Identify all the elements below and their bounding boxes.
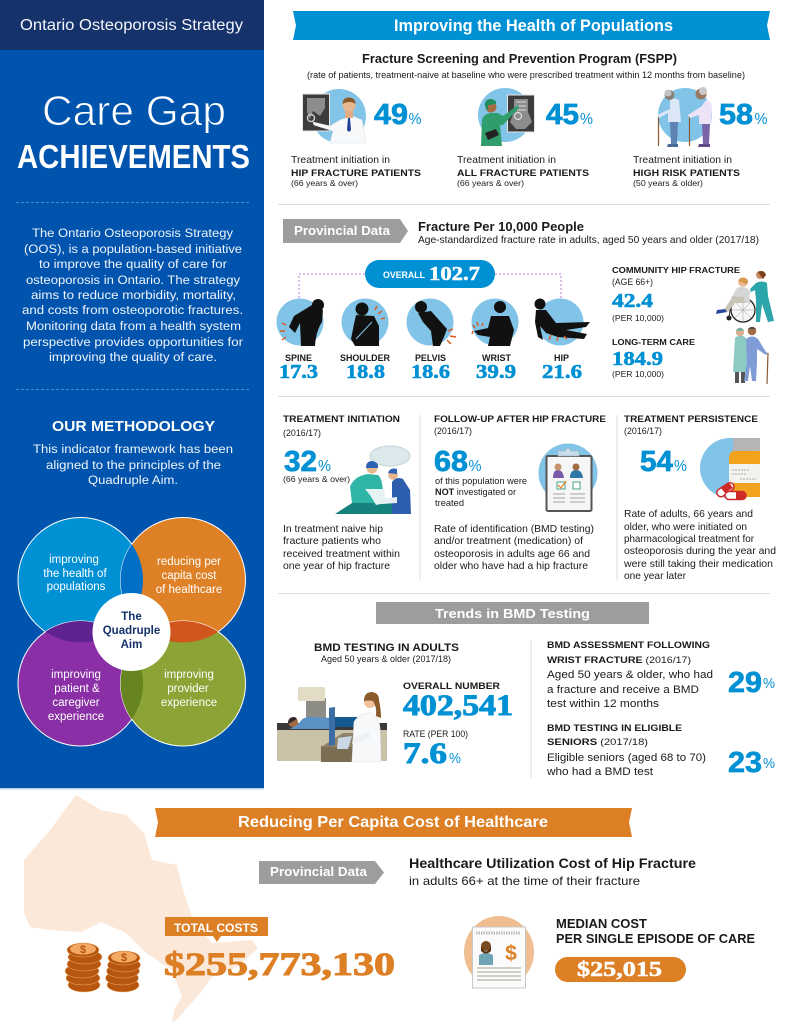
panel: treatment persistence (623, 414, 776, 582)
panel: treatment persistence: (2016/17) (624, 426, 662, 436)
venn label: cost: reducing per (157, 556, 221, 568)
shoulder: 18.8 (346, 361, 385, 383)
caption (457, 154, 589, 188)
pelvis: 18.6 (411, 361, 450, 383)
wrist: 39.9 (476, 361, 516, 383)
methodology heading: OUR METHODOLOGY (52, 419, 215, 435)
panel: treatment initiation: (66 years & over) (283, 474, 350, 484)
icon: BMD scanner (277, 687, 387, 762)
tag: provincial data (259, 861, 384, 884)
panel: BMD testing in adults: % (449, 750, 461, 767)
panel: follow-up after hip fracture: Rate of identification (BMD testing) (434, 523, 594, 535)
value: total costs: $255,773,130 (164, 947, 395, 983)
panel: treatment persistence: older, who were initiated on (624, 521, 747, 533)
methodology text (33, 442, 233, 487)
caption: Treatment initiation in (457, 154, 556, 166)
banner: reducing per capita cost of healthcare: Reducing Per Capita Cost of Healthcare (238, 814, 548, 831)
icon: wheelchair and carer (716, 271, 774, 322)
shoulder (340, 298, 390, 383)
heading: FSPP (307, 51, 745, 80)
icon: stacks of coins: $ (121, 952, 127, 964)
stat: median cost: MEDIAN COST (556, 917, 647, 931)
venn label: patient: patient & (54, 683, 100, 695)
tag: provincial data: Provincial Data (270, 865, 368, 879)
heading: FSPP: Fracture Screening and Prevention Program (FSPP) (362, 51, 677, 66)
hip: 21.6 (542, 361, 582, 383)
panel: treatment initiation: TREATMENT INITIATION (283, 414, 400, 425)
stat: long-term care: (PER 10,000) (612, 369, 664, 379)
stat: BMD following wrist fracture: Aged 50 years & older, who had (547, 669, 713, 681)
venn centre label (103, 611, 160, 651)
stat: BMD in eligible seniors: who had a BMD test (546, 766, 653, 778)
venn label: populations: improving (49, 554, 99, 566)
stat: median cost: PER SINGLE EPISODE OF CARE (556, 932, 755, 946)
venn label: populations (43, 554, 107, 593)
icon: invoice with person (464, 916, 534, 988)
stat: hip fracture patients (291, 89, 422, 188)
panel: BMD testing in adults: Aged 50 years & older (2017/18) (321, 654, 451, 665)
stat: community hip fracture: COMMUNITY HIP FRACTURE (612, 265, 740, 275)
panel: follow-up after hip fracture: NOT investigated or (435, 487, 516, 498)
panel: follow-up after hip fracture: 68 (434, 446, 468, 478)
caption: ALL FRACTURE PATIENTS (457, 168, 589, 179)
intro text: The Ontario Osteoporosis Strategy (32, 226, 234, 240)
hip: HIP (554, 353, 570, 364)
heading: FSPP: (rate of patients, treatment-naive at baseline who were prescribed treatment within 12 months from baseline) (307, 70, 745, 80)
stat: long-term care: LONG-TERM CARE (612, 337, 695, 347)
icon: elderly couple with canes (657, 87, 712, 147)
venn label: patient (48, 669, 104, 723)
overall pill: OVERALL (383, 270, 425, 280)
caption: (66 years & over) (291, 178, 358, 188)
heading: healthcare utilization cost: in adults 66+ at the time of their fracture (409, 874, 640, 888)
venn label: provider: improving (164, 669, 214, 681)
stat: BMD following wrist fracture: 29 (728, 667, 762, 699)
caption: Treatment initiation in (291, 154, 390, 166)
banner: improving the health of populations (293, 11, 770, 40)
fracture chart (276, 260, 590, 383)
intro text: perspective provides opportunities for (23, 335, 243, 349)
hip (534, 298, 590, 383)
panel: follow-up after hip fracture: and/or treatment (medication) of (434, 535, 583, 547)
tag: provincial data: Provincial Data (294, 224, 391, 238)
heading: fracture per 10,000 people: Age-standardized fracture rate in adults, aged 50 years and older (2017/18) (418, 234, 759, 246)
caption (291, 154, 421, 188)
panel: treatment initiation: fracture patients who (283, 535, 381, 547)
icon: doctor with x-ray (302, 89, 366, 143)
banner: improving the health of populations: Improving the Health of Populations (394, 17, 673, 35)
panel: follow-up after hip fracture: treated (435, 498, 464, 509)
panel: BMD testing in adults: RATE (PER 100) (403, 729, 468, 740)
shoulder: SHOULDER (340, 353, 390, 364)
panel: treatment persistence: Rate of adults, 66 years and (624, 508, 753, 520)
panel: treatment persistence: one year later (624, 570, 686, 582)
stat: community hip fracture: (AGE 66+) (612, 277, 653, 287)
title: Care Gap (42, 87, 226, 134)
panel: follow-up after hip fracture: osteoporosis in adults age 66 and (434, 548, 590, 560)
methodology text: aligned to the principles of the (46, 458, 221, 472)
panel: treatment persistence: osteoporosis during the year and (624, 545, 776, 557)
icon: clipboard (538, 444, 598, 511)
panel: follow-up after hip fracture: % (468, 458, 482, 475)
panel: treatment initiation (283, 414, 411, 572)
caption: Treatment initiation in (633, 154, 732, 166)
title (17, 87, 250, 176)
value: 49 (374, 99, 408, 131)
intro text (22, 226, 243, 364)
stat: BMD in eligible seniors (546, 723, 775, 779)
icon: stacks of coins (65, 943, 140, 992)
venn centre label: Quadruple (103, 625, 160, 637)
panel: BMD testing in adults: OVERALL NUMBER (403, 681, 500, 692)
panel: follow-up after hip fracture: of this population were (435, 476, 527, 487)
venn centre label: The (121, 611, 142, 623)
stat: long-term care: 184.9 (612, 348, 663, 370)
panel: follow-up after hip fracture (434, 414, 606, 572)
venn label: provider (161, 669, 217, 709)
heading bar: trends in BMD testing: Trends in BMD Testing (435, 606, 590, 621)
stat: community hip fracture: (PER 10,000) (612, 313, 664, 323)
stat: median cost (555, 917, 755, 982)
header bar: Ontario Osteoporosis Strategy (20, 17, 243, 34)
tag: total costs (165, 917, 268, 942)
value: 58 (719, 99, 753, 131)
caption (633, 154, 740, 188)
heading: fracture per 10,000 people (418, 219, 759, 246)
venn label: cost: capita cost (162, 570, 217, 582)
pelvis: PELVIS (415, 353, 446, 364)
icon: pill bottle (700, 438, 760, 500)
tag: provincial data (283, 219, 408, 243)
methodology text: This indicator framework has been (33, 442, 233, 456)
stat: BMD following wrist fracture: BMD ASSESSMENT FOLLOWING (547, 640, 710, 651)
intro text: Monitoring data from a health system (26, 319, 241, 333)
venn label: provider: provider (167, 683, 209, 695)
icon: surgeons (335, 446, 411, 514)
panel: treatment initiation: (2016/17) (283, 428, 321, 438)
overall pill: 102.7 (429, 263, 480, 285)
icon: nurse with x-ray (478, 88, 534, 146)
panel: follow-up after hip fracture: older who have had a hip fracture (434, 560, 588, 572)
icon: nurse and elderly patient (733, 327, 768, 384)
venn label: populations: populations (47, 581, 106, 593)
stat: BMD following wrist fracture (547, 640, 775, 710)
intro text: to improve the quality of care for (39, 257, 227, 271)
venn label: cost: of healthcare (156, 584, 222, 596)
venn label: patient: improving (51, 669, 101, 681)
venn label: populations: the health of (43, 568, 107, 580)
heading: healthcare utilization cost: Healthcare Utilization Cost of Hip Fracture (409, 855, 696, 871)
stat: BMD following wrist fracture: WRIST FRACTURE (2016/17) (547, 655, 691, 666)
intro text: (OOS), is a population-based initiative (24, 242, 242, 256)
tag: total costs: TOTAL COSTS (174, 923, 258, 935)
stat: BMD in eligible seniors: 23 (728, 747, 762, 779)
header bar (0, 0, 264, 50)
panel: treatment persistence: pharmacological treatment for (624, 533, 754, 545)
stat: median cost: $25,015 (577, 957, 662, 981)
stat: high risk patients: % (754, 111, 768, 128)
stat: BMD following wrist fracture: test within 12 months (547, 698, 660, 710)
panel: treatment initiation: % (318, 458, 331, 475)
spine (276, 298, 324, 383)
intro text: improving the quality of care. (49, 350, 217, 364)
panel: follow-up after hip fracture: FOLLOW-UP AFTER HIP FRACTURE (434, 414, 606, 425)
stat: BMD in eligible seniors: SENIORS (2017/18) (547, 737, 648, 748)
stat: community hip fracture (612, 265, 774, 323)
panel: follow-up after hip fracture: (2016/17) (434, 426, 472, 436)
panel: left sidebar (0, 0, 264, 790)
caption: (66 years & over) (457, 178, 524, 188)
stat: BMD following wrist fracture: % (763, 675, 775, 692)
caption: (50 years & older) (633, 178, 703, 188)
heading: fracture per 10,000 people: Fracture Per 10,000 People (418, 219, 584, 234)
panel: treatment persistence: TREATMENT PERSISTENCE (624, 414, 758, 425)
panel: treatment initiation: 32 (284, 446, 317, 478)
panel: treatment persistence: were still taking their medication (623, 558, 773, 570)
panel: BMD testing in adults: 7.6 (403, 737, 447, 770)
venn label: patient: caregiver (52, 697, 100, 709)
panel: treatment persistence: 54 (640, 446, 673, 478)
stat: all fracture patients (457, 88, 593, 188)
panel: treatment persistence: % (674, 458, 687, 475)
methodology text: Quadruple Aim. (88, 473, 178, 487)
spine: 17.3 (279, 361, 318, 383)
wrist: WRIST (482, 353, 511, 364)
venn label: cost (156, 556, 222, 596)
venn label: patient: experience (48, 711, 104, 723)
caption: HIGH RISK PATIENTS (633, 168, 740, 179)
map: Ontario silhouette (24, 795, 258, 1023)
venn centre label: Aim (121, 639, 142, 651)
stat: BMD in eligible seniors: Eligible seniors (aged 68 to 70) (547, 752, 706, 764)
panel: BMD testing in adults: 402,541 (403, 689, 513, 722)
stat: community hip fracture: 42.4 (612, 290, 653, 312)
panel: treatment initiation: received treatment within (283, 548, 400, 560)
icon: invoice with person: $ (505, 942, 517, 965)
panel: BMD testing in adults (277, 642, 513, 770)
venn label: provider: experience (161, 697, 217, 709)
stat: high risk patients (633, 87, 768, 188)
stat: BMD following wrist fracture: a fracture and receive a BMD (547, 684, 699, 696)
stat: long-term care (612, 327, 768, 384)
pelvis (406, 298, 456, 383)
stat: hip fracture patients: % (408, 111, 422, 128)
spine: SPINE (285, 353, 312, 364)
intro text: aims to reduce morbidity, mortality, (31, 288, 236, 302)
panel: BMD testing in adults: BMD TESTING IN ADULTS (314, 642, 459, 654)
overall pill (365, 260, 495, 288)
panel: treatment initiation: In treatment naive hip (283, 523, 383, 535)
stat: BMD in eligible seniors: BMD TESTING IN ELIGIBLE (547, 723, 682, 734)
quadruple aim venn diagram (18, 518, 246, 746)
stat: BMD in eligible seniors: % (763, 755, 775, 772)
banner: reducing per capita cost of healthcare (155, 808, 632, 837)
title: ACHIEVEMENTS (17, 139, 250, 176)
intro text: osteoporosis in Ontario. The strategy (26, 273, 241, 287)
caption: HIP FRACTURE PATIENTS (291, 168, 421, 179)
stat: all fracture patients: % (580, 111, 593, 128)
intro text: and costs from osteoporotic fractures. (22, 303, 243, 317)
panel: treatment initiation: one year of hip fracture (283, 560, 390, 572)
heading bar: trends in BMD testing (376, 602, 649, 624)
wrist (472, 298, 518, 383)
value: 45 (546, 99, 579, 131)
icon: stacks of coins: $ (80, 944, 86, 956)
heading: healthcare utilization cost (409, 855, 696, 888)
